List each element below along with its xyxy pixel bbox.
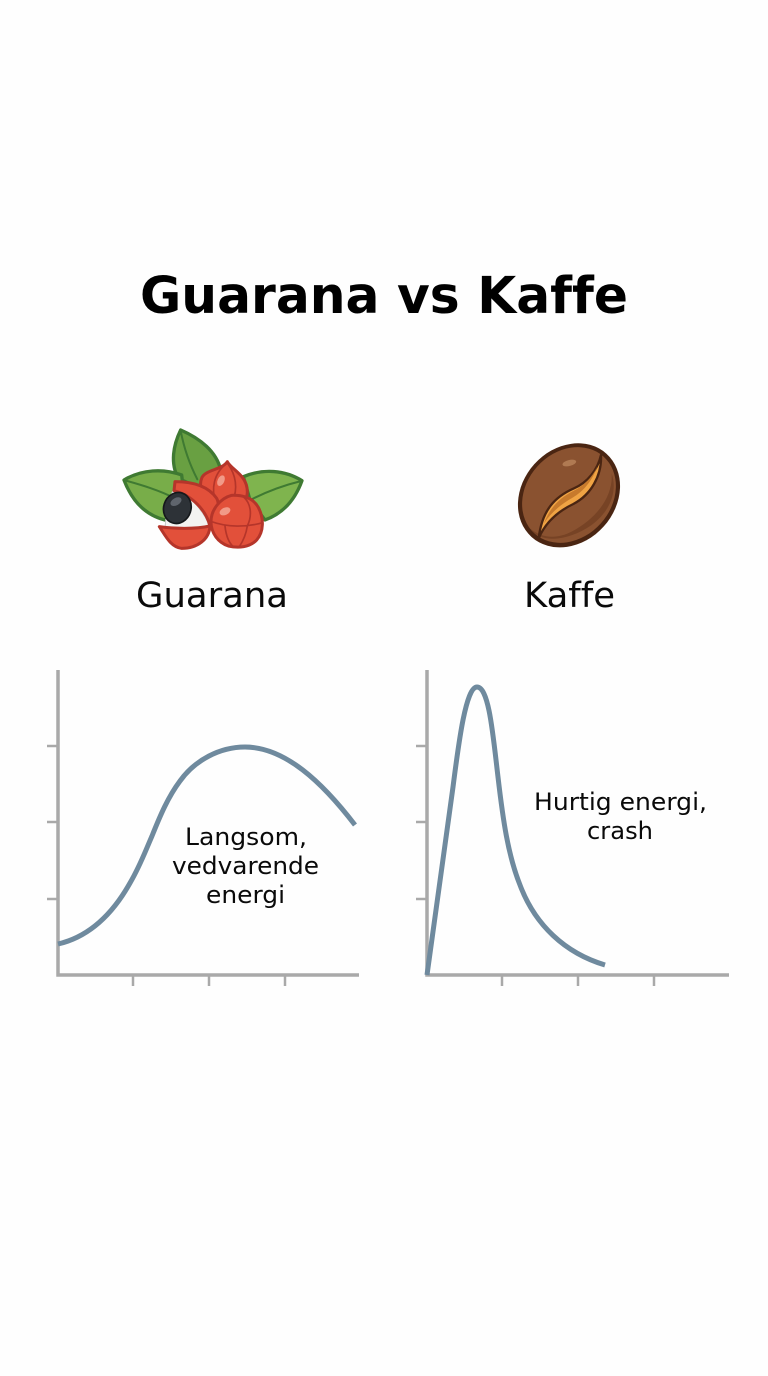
- annotation: slow sustained energy: energi: [206, 881, 285, 909]
- curve: quick energy and crash: [427, 687, 605, 975]
- annotation: slow sustained energy: vedvarende: [172, 852, 319, 880]
- title: Guarana vs Kaffe: [140, 267, 628, 326]
- label: Guarana: Guarana: [136, 576, 288, 616]
- icon part: bean body: [497, 422, 641, 568]
- chart axes: [416, 670, 729, 986]
- label: Kaffe: Kaffe: [524, 576, 615, 616]
- icon: coffee bean: [497, 422, 641, 568]
- chart: coffee energy curve: [416, 670, 729, 986]
- icon part: top leaf: [173, 430, 221, 488]
- icon part: left leaf: [124, 471, 185, 520]
- annotation: quick energy and crash: [534, 788, 707, 845]
- icon part: top berry: [201, 462, 247, 507]
- icon part: open berry with seed: [159, 482, 218, 548]
- annotation: slow sustained energy: [172, 823, 319, 909]
- chart axes: [47, 670, 359, 986]
- icon part: front berry: [211, 495, 263, 547]
- chart: guarana energy curve: [47, 670, 359, 986]
- icon part: bean crease: [539, 455, 601, 538]
- annotation: quick energy and crash: crash: [587, 817, 653, 845]
- icon part: right leaf: [243, 471, 302, 520]
- annotation: slow sustained energy: Langsom,: [185, 823, 307, 851]
- curve: slow sustained energy: [58, 747, 355, 944]
- icon: guarana berries and leaves: [124, 430, 302, 548]
- annotation: quick energy and crash: Hurtig energi,: [534, 788, 707, 816]
